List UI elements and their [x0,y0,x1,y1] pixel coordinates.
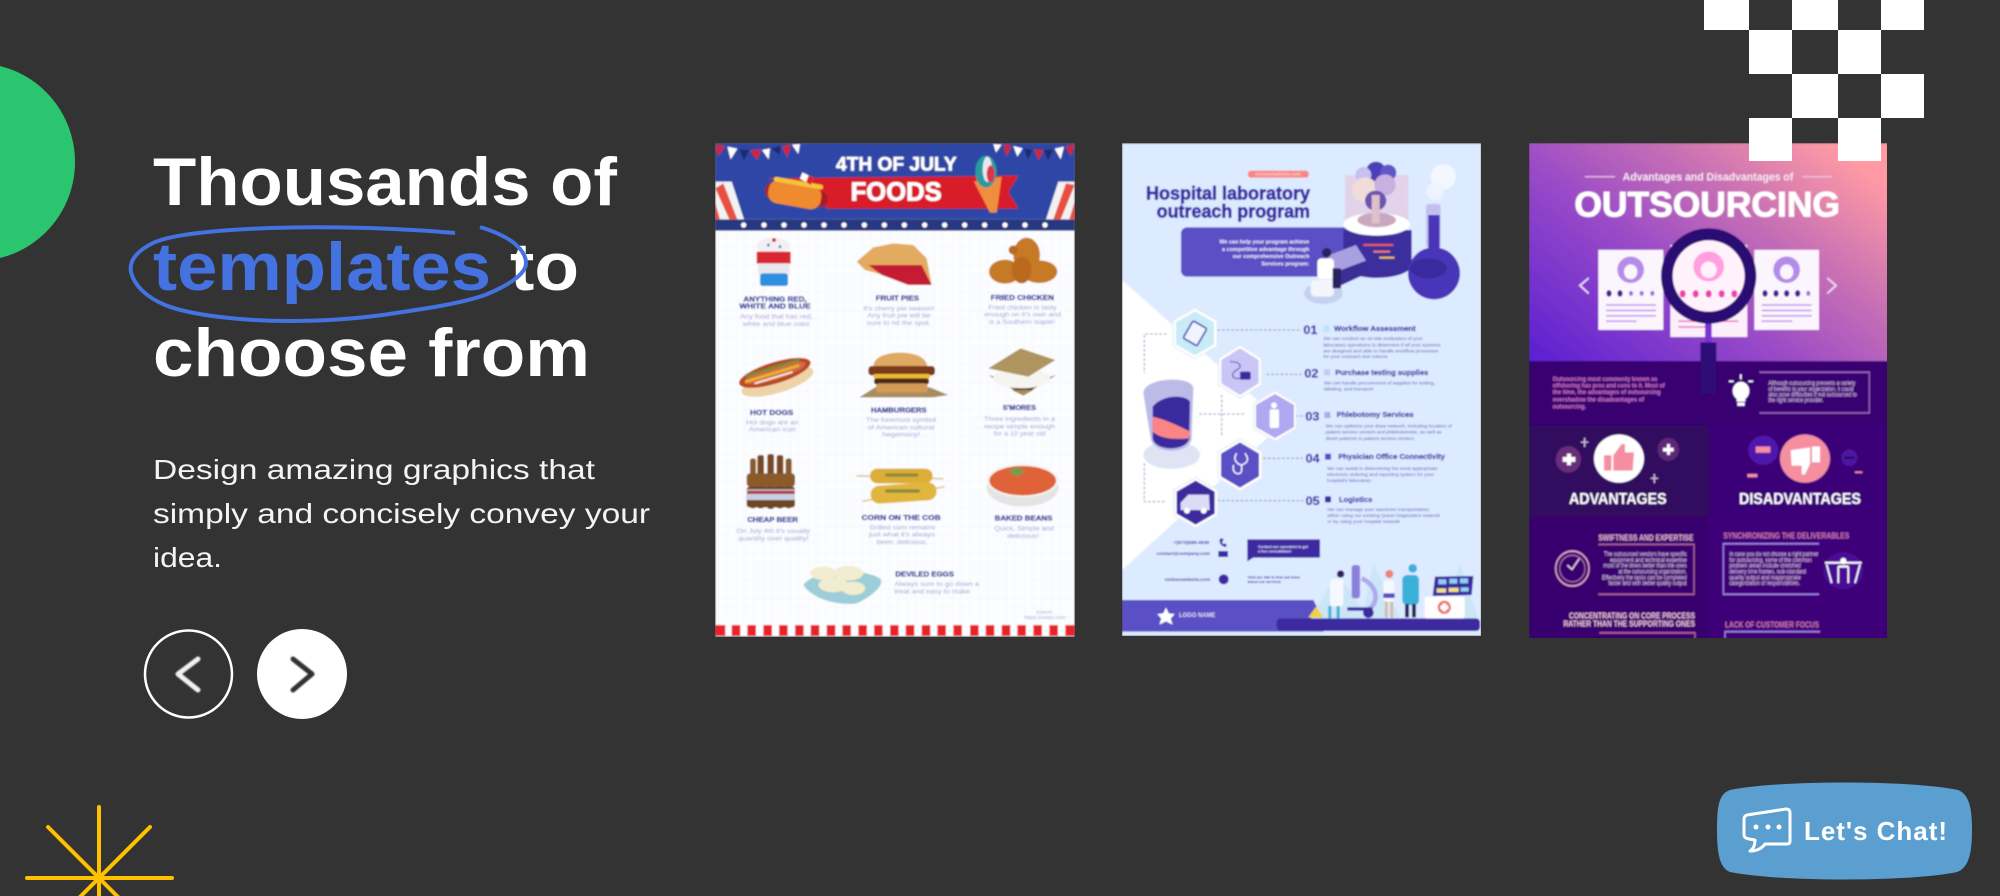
illustration: beaker on pedestal [1143,379,1200,469]
poster title: outreach program [1157,200,1310,221]
service list [1303,323,1453,524]
subtitle: idea. [153,542,222,573]
intro box: Services program: [1261,261,1309,267]
panel: disadvantages [1709,425,1888,517]
dashed connectors [1144,330,1303,502]
subtitle: Design amazing graphics that [153,454,595,485]
food labels and descriptions: is a Southern staple! [989,319,1055,326]
service list: Purchase testing supplies [1335,368,1428,377]
note box: of benefits to your organization, it could [1768,387,1853,393]
poster title [1146,182,1311,221]
poster: hospital laboratory outreach program [1122,143,1481,636]
hexagon icon 2: testing supplies [1219,345,1261,398]
service list: divert patients to patient service centers [1326,436,1414,441]
icon: speech bubble [1744,809,1790,851]
food labels and descriptions: delicious! [1007,533,1039,540]
food labels and descriptions: for a 10 year old [994,431,1046,438]
heading: templates [153,229,491,305]
service list: 03 [1305,410,1320,424]
white checker pattern [1704,0,1924,161]
next button [257,629,347,719]
food labels and descriptions: sure to hit the spot. [867,320,931,327]
food labels and descriptions: Grilled corn remains [869,524,935,531]
service list: 04 [1306,452,1320,466]
hexagon icon 1: clipboard [1173,308,1217,359]
poster subtitle and title: Advantages and Disadvantages of [1623,172,1794,184]
block: synchronizing the deliverables [1709,518,1888,642]
poster title: FOODS [851,177,942,207]
panel: advantages: ADVANTAGES [1569,491,1667,508]
service list: Logistics [1339,495,1372,504]
contact details [1157,538,1320,584]
heading: choose from [153,315,590,391]
food labels and descriptions: CORN ON THE COB [862,515,941,522]
service list: either using our existing Quest Diagnostics network [1327,513,1441,518]
illustration: flask with steam [1408,164,1460,299]
block: concentrating on core process: RATHER THAN THE SUPPORTING ONES [1563,619,1695,629]
service list: We can conduct an on-site evaluation of your [1323,336,1423,341]
yellow starburst [27,807,172,896]
food labels and descriptions: BAKED BEANS [995,516,1053,523]
food: red white blue parfait [757,238,791,286]
contact details: visitourwebsite.com [1165,577,1210,582]
hexagon icon 4: stethoscope [1218,439,1262,491]
pill tag: visitourwebsite.com [1255,172,1301,177]
contact details: Visit our site to find out more [1248,575,1300,579]
icon: light bulb [1729,374,1753,406]
heading: Thousands of [153,144,617,220]
icon: ice cream cone [974,156,1002,213]
pill tag [1248,171,1309,178]
contact details: +(873)588-4930 [1173,540,1210,545]
block: swiftness and expertise: at the outsourcing organization. [1618,569,1687,576]
intro box: our comprehensive Outreach [1233,254,1310,260]
contact details: Contact our specialist to get [1258,545,1309,549]
footer band with logo [1122,600,1323,632]
hexagon icon 5: ambulance [1174,477,1218,528]
poster title: 4TH OF JULY [836,155,957,176]
contact details: contact@company.com [1157,551,1210,556]
note box: also pose difficulties if not outsourced to [1768,392,1857,399]
block: synchronizing the deliverables: In case you do not choose a right partner [1729,552,1818,558]
poster title [836,155,957,207]
block: lack of customer focus [1725,620,1820,641]
block: synchronizing the deliverables: categorization of responsibilities. [1729,581,1800,587]
service list: 01 [1303,323,1318,337]
carousel arrows [1580,278,1836,293]
block: synchronizing the deliverables: for outsourcing, some of the common [1729,557,1812,564]
block: swiftness and expertise: equipment and technical expertise [1610,557,1687,564]
service list: laboratory operations to determine if all your systems [1323,342,1441,347]
block: concentrating on core process [1563,611,1695,641]
food: baked beans [987,464,1059,507]
food labels and descriptions: On July 4th it's usually [737,528,811,535]
food labels and descriptions: S'MORES [1003,405,1036,412]
poster: advantages and disadvantages of outsourcing [1529,143,1888,642]
food labels and descriptions: CHEAP BEER [747,517,798,524]
service list: labeling, and transport [1324,387,1374,392]
note box: Although outsourcing presents a variety [1768,381,1855,387]
food: fried chicken [989,238,1057,284]
food labels and descriptions: https://eater.com [1024,615,1066,620]
service list: Workflow Assessment [1334,324,1416,333]
block: swiftness and expertise [1529,518,1709,642]
block: synchronizing the deliverables: SYNCHRONIZING THE DELIVERABLES [1723,531,1849,541]
illustration: lab machine with scientist [1304,162,1412,304]
chat label: Let's Chat! [1804,816,1947,846]
food labels and descriptions: Any food that has red, [740,314,813,321]
service list: We can optimize your draw network, including location of [1326,424,1453,429]
food: s'mores [988,348,1056,396]
intro paragraph: outsourcing. [1553,404,1586,411]
icon: cartoon hot dog [764,171,828,210]
block: synchronizing the deliverables: quality output and inappropriate [1729,575,1801,582]
food labels and descriptions: Quick, Simple and [994,526,1055,533]
service list: Phlebotomy Services [1337,410,1414,419]
block: synchronizing the deliverables: problem areas include stretched [1729,563,1801,570]
service list: electronic ordering and reporting system for your [1327,472,1435,477]
poster: 4th of July foods [715,143,1075,637]
review card left [1598,250,1663,330]
block: swiftness and expertise: faster and with better quality output [1608,581,1687,587]
food: cherry pie [857,243,932,285]
chat button [1717,782,1972,880]
service list: We can assist in determining the most appropriate [1327,466,1438,471]
service list: We can handle procurement of supplies for testing, [1324,381,1435,386]
intro box: We can help your program achieve [1219,240,1309,246]
hexagon icon 3: phlebotomy figure [1254,391,1296,441]
block: swiftness and expertise: The outsourced vendors have specific [1604,552,1687,558]
food labels and descriptions: quantity over quality! [738,535,809,542]
food labels and descriptions: WHITE AND BLUE [739,304,811,311]
intro paragraph: the time, the advantages of outsourcing [1553,390,1661,396]
poster subtitle and title [1574,172,1840,218]
food: hot dog [738,356,814,398]
food labels and descriptions: ANYTHING RED, [743,296,807,303]
red checker bottom strip [715,625,1075,636]
subtitle: simply and concisely convey your [153,498,650,529]
food labels and descriptions: Source: [1036,610,1053,615]
food labels and descriptions: FRIED CHICKEN [991,295,1054,302]
service list: Physician Office Connectivity [1338,452,1446,461]
poster title: Hospital laboratory [1146,182,1311,203]
food labels and descriptions: It's cherry pie season! [863,305,935,312]
intro paragraph: Outsourcing most commonly known as [1553,377,1657,383]
service list: We can manage your specimen transportation, [1327,507,1430,512]
panel: advantages [1529,425,1709,517]
block: concentrating on core process: CONCENTRATING ON CORE PROCESS [1569,611,1695,621]
service list: hospital's laboratory [1327,478,1372,483]
service list: for your outreach test volume [1323,354,1388,359]
food: deviled eggs [803,566,881,604]
heading [153,144,617,391]
green half circle [0,63,75,261]
service list: 05 [1306,494,1320,508]
intro box [1181,227,1351,277]
food labels and descriptions: been: delicious. [877,539,928,546]
note box: the right service provider. [1768,398,1824,404]
block: swiftness and expertise: Effectively the tasks can be completed [1602,575,1687,582]
food labels and descriptions: Three ingredients in a [984,416,1056,423]
food labels and descriptions: Hot dogs are an [746,419,799,426]
footer band with logo: LOGO NAME [1179,613,1215,619]
food labels and descriptions: Always sure to go down a [895,581,980,588]
previous button [145,630,232,718]
service list: 02 [1304,366,1319,380]
hand drawn ellipse around templates [131,227,526,321]
intro paragraph: overshadow the disadvantages of [1553,397,1644,404]
food: corn on the cob [857,469,945,504]
food labels and descriptions: enough on it's own and [984,312,1062,319]
panel: disadvantages: DISADVANTAGES [1739,491,1861,508]
food: beer bottles [747,454,795,509]
intro paragraph: offshoring has pros and cons to it. Most of [1553,383,1665,390]
food labels and descriptions: of American cultural [868,424,934,431]
food labels and descriptions: just what it's always [868,532,935,539]
food labels and descriptions: hegemony! [882,432,920,439]
poster subtitle and title: OUTSOURCING [1574,185,1840,224]
food labels and descriptions [737,295,1066,620]
food labels and descriptions: Fried chicken is tasty [988,305,1058,312]
service list: patient service centers and phlebotomists, as well as [1326,430,1442,435]
contact details: about our services [1248,580,1281,584]
food labels and descriptions: FRUIT PIES [876,296,919,303]
food labels and descriptions: DEVILED EGGS [895,571,954,578]
block: synchronizing the deliverables: delivery time frames, sub-standard [1729,569,1806,576]
food labels and descriptions: recipe simple enough [984,423,1056,430]
food labels and descriptions: treat and easy to make [895,588,971,595]
food labels and descriptions: Any fruit pie will be [867,313,931,320]
center card with magnifier [1661,228,1756,394]
intro box: a competitive advantage through [1222,247,1310,253]
block: lack of customer focus: LACK OF CUSTOMER FOCUS [1725,620,1819,630]
poster header banner [715,143,1075,231]
food labels and descriptions: white and blue color [741,321,810,328]
review card right [1754,250,1819,330]
subtitle [153,454,650,573]
illustration: lab team scene [1277,563,1480,631]
food labels and descriptions: The foremost symbol [866,417,936,424]
food: hamburger [859,353,948,397]
food labels and descriptions: HOT DOGS [750,410,794,417]
contact details: a free consultation! [1258,550,1291,554]
food labels and descriptions: HAMBURGERS [871,408,927,415]
service list: or by using your hospital network [1327,519,1401,524]
block: swiftness and expertise: SWIFTNESS AND EXPERTISE [1598,533,1693,543]
intro paragraph [1553,377,1665,411]
food labels and descriptions: American icon [749,426,797,433]
note box [1759,372,1869,413]
service list: are designed and able to handle workflow processes [1323,348,1438,353]
heading: to [510,229,579,305]
block: swiftness and expertise: most of the times better than the ones [1603,563,1687,570]
